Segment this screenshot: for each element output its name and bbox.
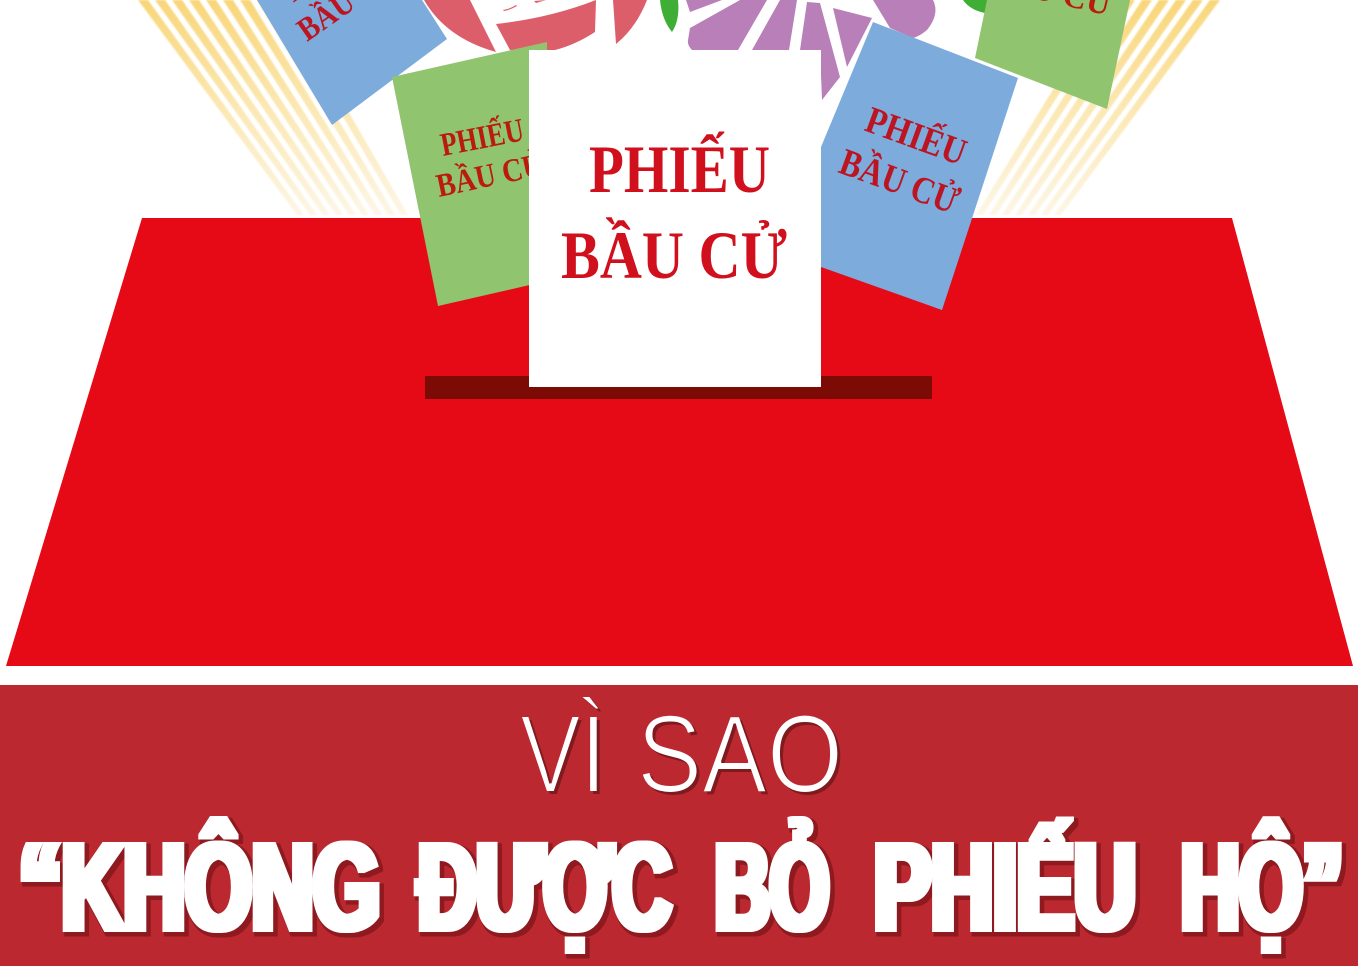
title: main headline: ĐƯỢC — [418, 820, 671, 956]
ballot: green left: PHIẾU — [437, 110, 527, 164]
ballot: white front: PHIẾU — [589, 131, 770, 207]
leaf: green right — [963, 0, 990, 13]
title: first line: SAO — [637, 693, 843, 816]
title: main headline: “KHÔNG — [19, 820, 380, 956]
ballot: green left — [392, 42, 548, 306]
ballot: blue right: PHIẾU — [860, 98, 972, 174]
ballot: green left: BẦU CỬ — [433, 144, 548, 205]
ballot box — [6, 218, 1353, 666]
ballot: blue right: BẦU CỬ — [834, 140, 965, 223]
leaf: green left — [660, 0, 678, 32]
flower: red — [424, 0, 647, 52]
ballot: white front: BẦU CỬ — [561, 217, 787, 293]
title: main headline — [19, 820, 1343, 956]
ballot: green top right — [975, 0, 1130, 109]
ballot: blue right — [821, 22, 1018, 310]
ballot box slot — [425, 376, 932, 399]
ballot: white front — [529, 50, 821, 387]
title: first line — [520, 693, 843, 816]
title banner — [0, 685, 1358, 966]
sun rays right — [976, 0, 1220, 215]
title: first line: VÌ — [520, 693, 606, 816]
title: main headline: PHIẾU — [874, 820, 1136, 956]
sun rays left — [138, 0, 408, 215]
ballot: blue top left — [257, 0, 447, 125]
title: main headline: BỎ — [715, 820, 829, 956]
flower: purple — [686, 0, 935, 100]
